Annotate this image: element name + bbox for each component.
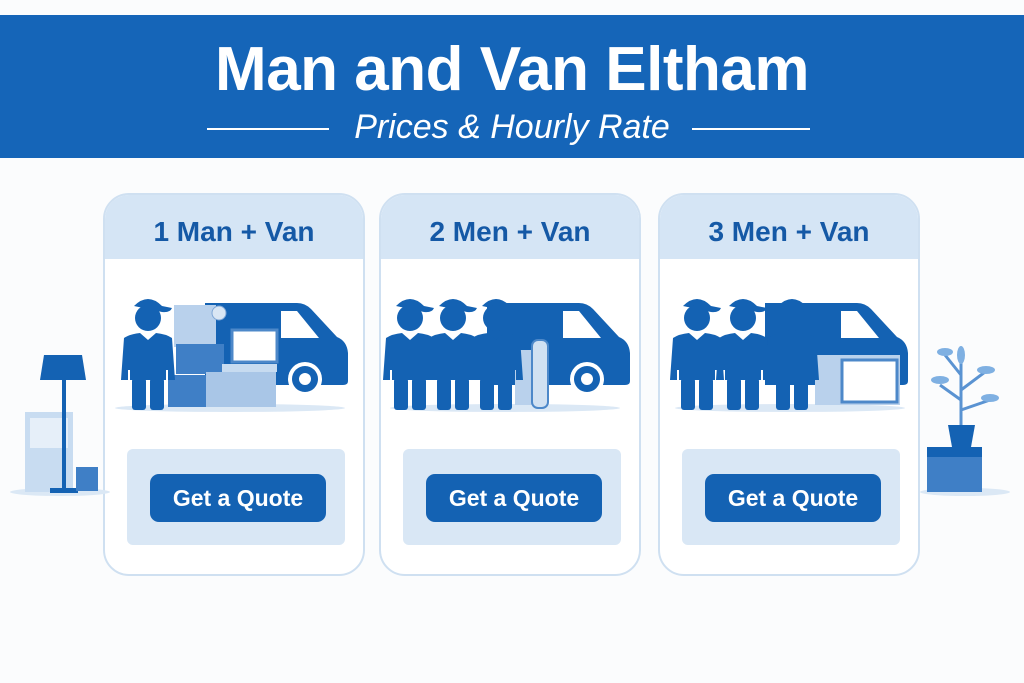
card: 3 men xyxy=(658,193,920,576)
quote button panel xyxy=(127,449,345,545)
illustration: 3 men, furniture, van xyxy=(670,299,908,412)
card heading xyxy=(660,195,918,259)
button: Get a Quote xyxy=(728,485,858,511)
button xyxy=(705,474,881,522)
card heading: 3 Men + Van xyxy=(708,216,870,247)
decoration: plant on box xyxy=(920,346,1010,496)
quote button panel xyxy=(403,449,621,545)
card: 2 men xyxy=(379,193,641,576)
header band xyxy=(0,15,1024,158)
card heading xyxy=(381,195,639,259)
button xyxy=(150,474,326,522)
quote button panel xyxy=(682,449,900,545)
card heading xyxy=(105,195,363,259)
card heading: 2 Men + Van xyxy=(429,216,591,247)
button xyxy=(426,474,602,522)
button: Get a Quote xyxy=(173,485,303,511)
card heading: 1 Man + Van xyxy=(153,216,315,247)
title: Man and Van Eltham xyxy=(215,35,809,104)
subtitle: Prices & Hourly Rate xyxy=(354,108,670,146)
decoration: lamp and shelf xyxy=(10,355,110,496)
illustration: 2 men, dolly, van xyxy=(383,299,630,412)
button: Get a Quote xyxy=(449,485,579,511)
illustration: 1 man, boxes, van xyxy=(115,299,348,412)
card: 1 man xyxy=(103,193,365,576)
